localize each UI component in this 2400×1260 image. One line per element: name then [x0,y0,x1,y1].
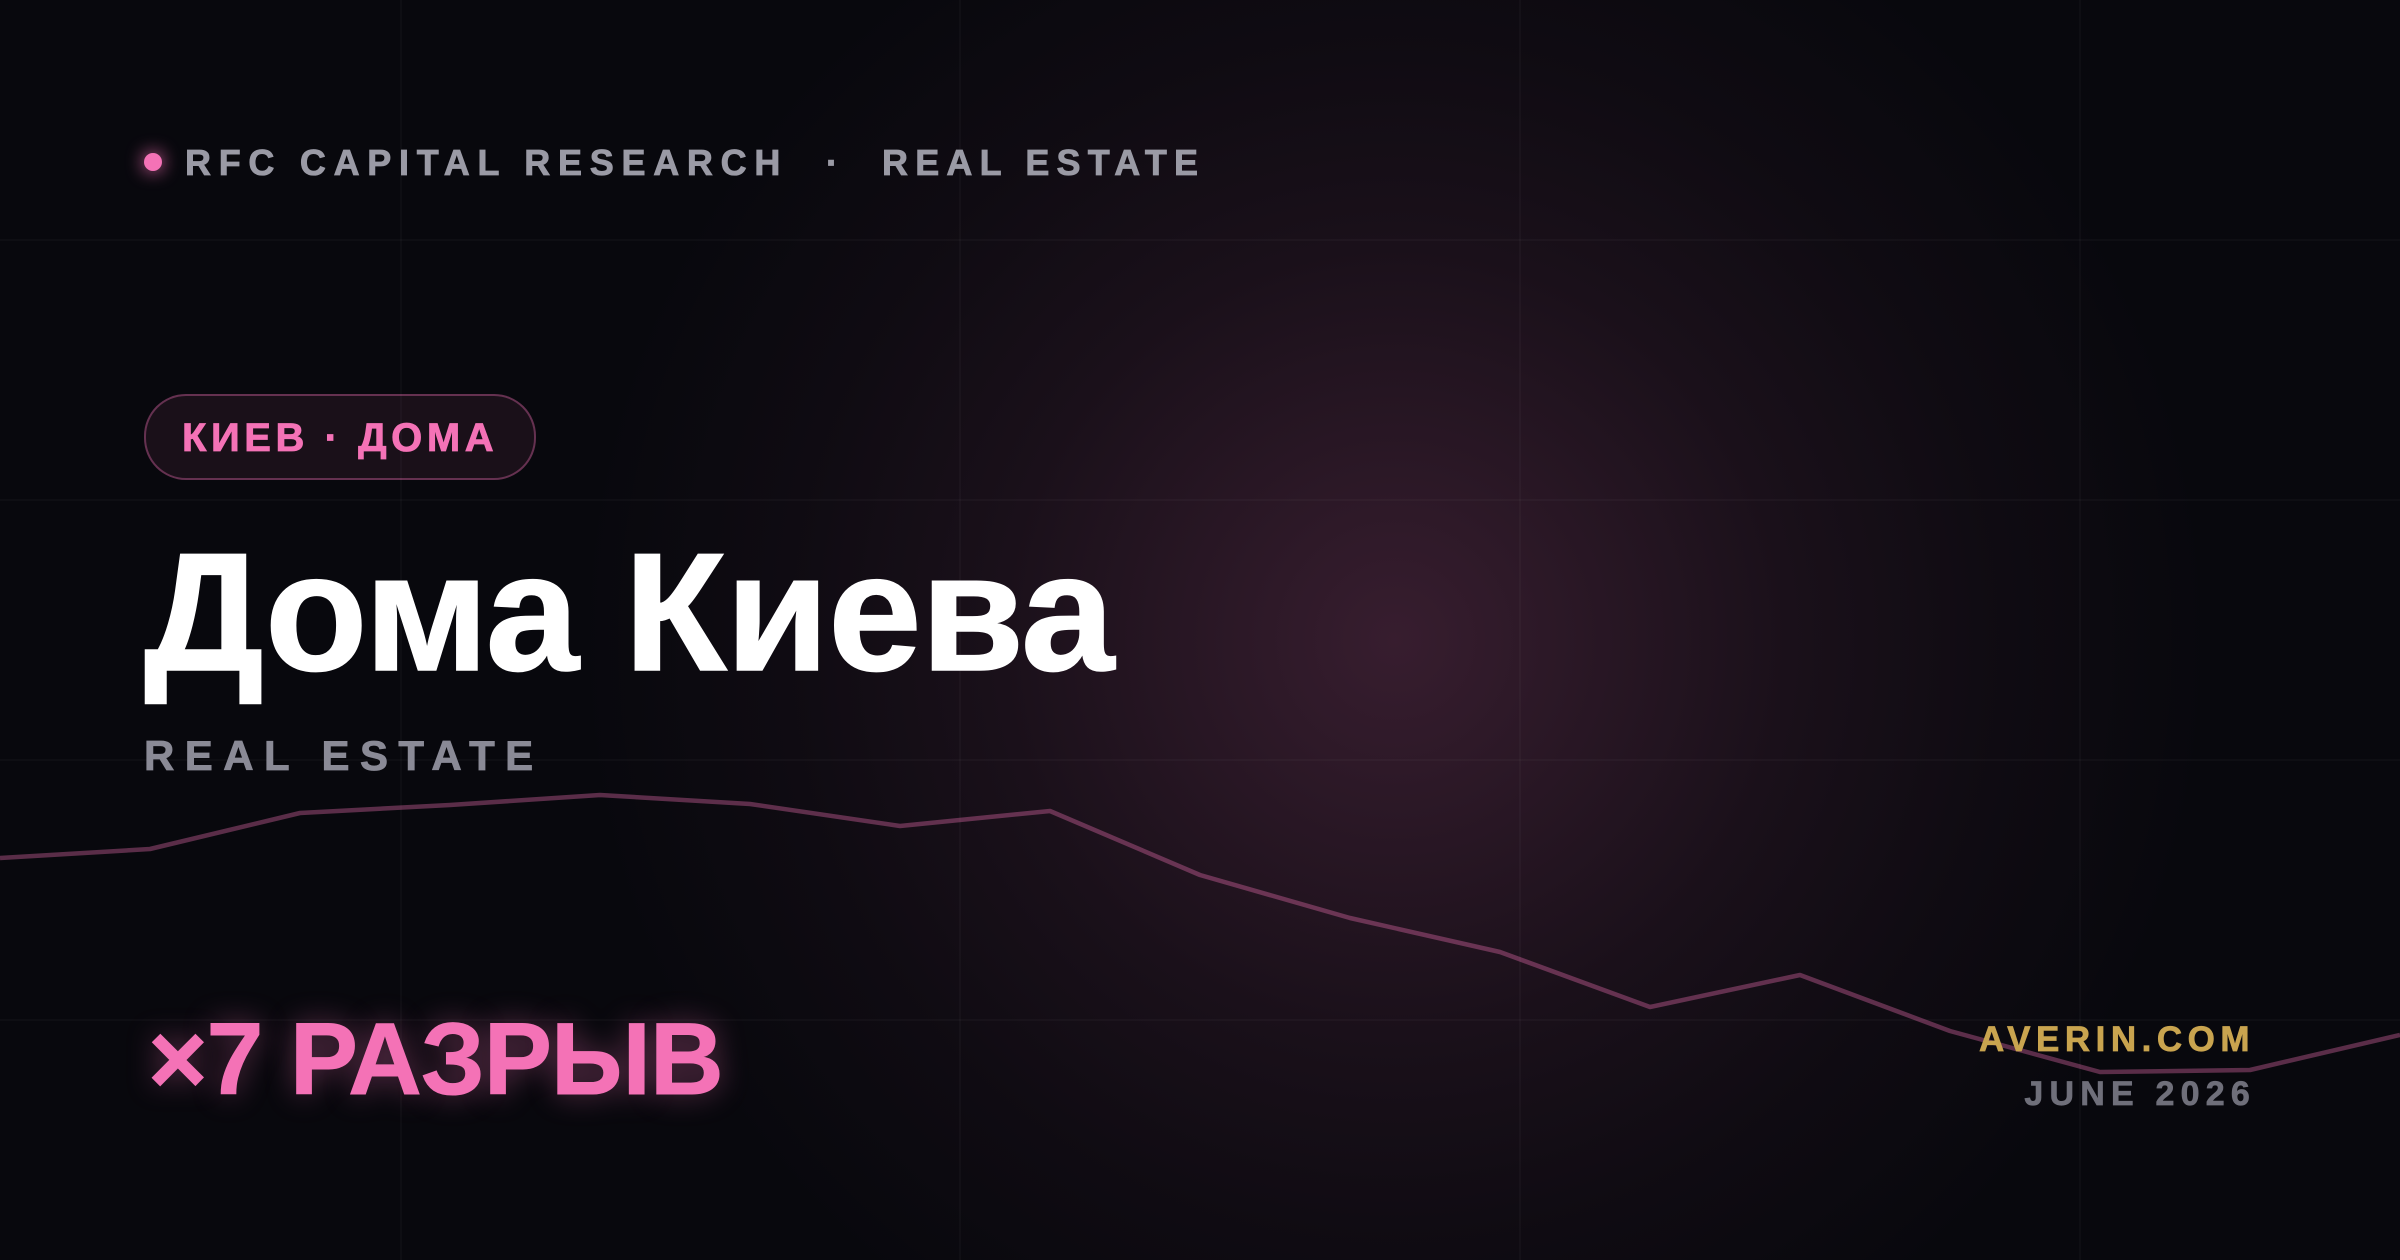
date: JUNE 2026 [2024,1075,2256,1113]
header text: publisher: RFC CAPITAL RESEARCH [185,142,788,183]
header separator dot: · [826,142,838,183]
source site: AVERIN.COM [1979,1020,2255,1059]
icon: pink status dot [144,153,162,171]
header text: sector: REAL ESTATE [882,142,1205,183]
header label [132,140,1205,184]
title: Дома Киева [144,518,1114,706]
badge: city and category [144,394,536,480]
key figure callout: ×7 РАЗРЫВ [148,1002,723,1116]
subtitle: REAL ESTATE [144,732,544,779]
badge text: КИЕВ · ДОМА [182,416,498,460]
